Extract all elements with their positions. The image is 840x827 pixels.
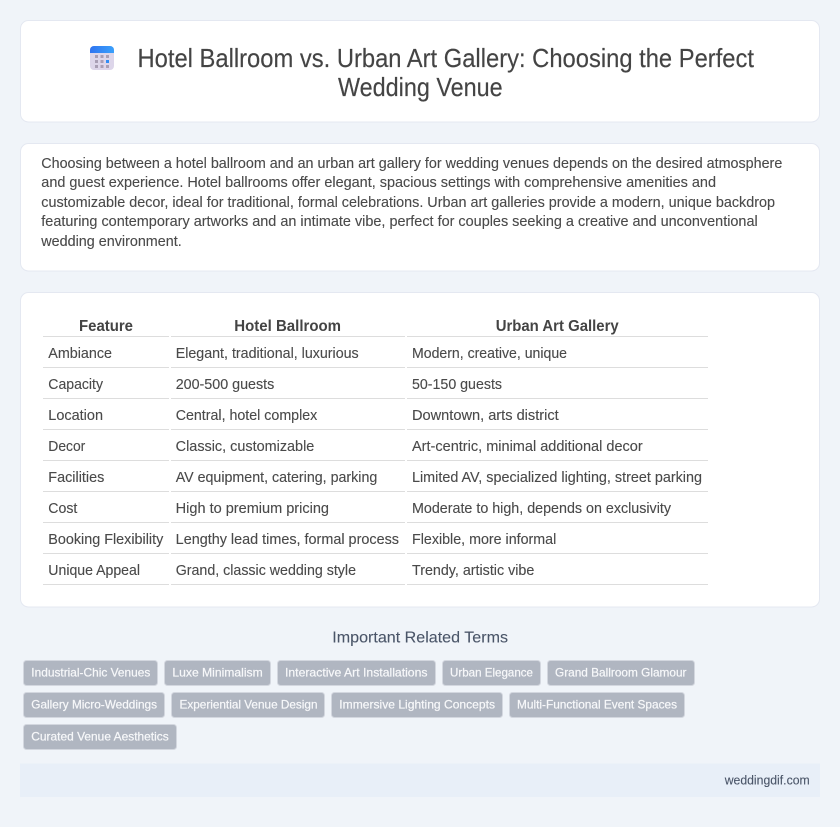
row: location: Central, hotel complex: [176, 408, 318, 424]
row: ambiance: Ambiance: [48, 346, 112, 362]
tag: [510, 692, 684, 718]
row: cost: High to premium pricing: [176, 501, 329, 517]
tag: Multi-Functional Event Spaces: [517, 698, 677, 712]
row: unique appeal: Unique Appeal: [48, 563, 140, 579]
tag: [278, 660, 436, 686]
tag: [24, 692, 164, 718]
intro paragraph: customizable decor, ideal for traditional, formal celebrations. Urban art galleries provide a modern, unique backdrop: [41, 195, 775, 211]
tag: [172, 692, 324, 718]
row: decor: Decor: [48, 439, 85, 455]
row: facilities: Limited AV, specialized lighting, street parking: [412, 470, 702, 486]
panel: introduction: [20, 144, 820, 271]
row: cost: [43, 501, 708, 523]
table header row: Hotel Ballroom: [234, 318, 341, 335]
panel: related term tags: [24, 660, 694, 750]
row: unique appeal: [43, 563, 708, 585]
intro paragraph: Choosing between a hotel ballroom and an urban art gallery for wedding venues depends on the desired atmosphere: [41, 156, 782, 172]
footer: [20, 764, 820, 797]
row: decor: Art-centric, minimal additional decor: [412, 439, 643, 455]
row: booking flexibility: [43, 532, 708, 554]
row: ambiance: Modern, creative, unique: [412, 346, 567, 362]
row: ambiance: Elegant, traditional, luxurious: [176, 346, 359, 362]
row: booking flexibility: Flexible, more informal: [412, 532, 556, 548]
row: capacity: Capacity: [48, 377, 104, 393]
row: facilities: Facilities: [48, 470, 104, 486]
tag: [442, 660, 540, 686]
tag: [332, 692, 502, 718]
tag: Grand Ballroom Glamour: [555, 666, 686, 680]
tag: Curated Venue Aesthetics: [31, 730, 169, 744]
tag: Industrial-Chic Venues: [31, 666, 150, 680]
row: location: [43, 408, 708, 430]
row: unique appeal: Trendy, artistic vibe: [412, 563, 534, 579]
tag: [164, 660, 270, 686]
panel: comparison table: [20, 292, 820, 607]
table header row: [43, 318, 708, 337]
tag: [24, 660, 158, 686]
intro paragraph: [40, 156, 782, 250]
tag: [548, 660, 694, 686]
icon: calendar: [90, 46, 114, 70]
tag: Gallery Micro-Weddings: [31, 698, 157, 712]
row: capacity: 200-500 guests: [176, 377, 274, 393]
row: booking flexibility: Booking Flexibility: [48, 532, 164, 548]
row: facilities: AV equipment, catering, parking: [176, 470, 377, 486]
tag: Experiential Venue Design: [180, 698, 318, 712]
row: cost: Moderate to high, depends on exclusivity: [412, 501, 672, 517]
table header row: Urban Art Gallery: [496, 318, 619, 335]
intro paragraph: featuring contemporary artworks and an intimate vibe, perfect for couples seeking a creative and unconventional: [41, 214, 758, 230]
row: ambiance: [43, 346, 708, 368]
tag: Urban Elegance: [450, 666, 533, 680]
footer domain: weddingdif.com: [724, 773, 810, 787]
row: decor: [43, 439, 708, 461]
row: capacity: [43, 377, 708, 399]
row: capacity: 50-150 guests: [412, 377, 502, 393]
tag: [24, 724, 176, 750]
intro paragraph: wedding environment.: [40, 234, 182, 250]
table header row: Feature: [79, 318, 133, 335]
row: location: Downtown, arts district: [412, 408, 559, 424]
row: location: Location: [48, 408, 103, 424]
tag: Interactive Art Installations: [285, 666, 428, 680]
title: [138, 45, 754, 102]
tag: Luxe Minimalism: [172, 666, 263, 680]
row: cost: Cost: [48, 501, 77, 517]
heading: important related terms: Important Related Terms: [332, 630, 508, 647]
title: Hotel Ballroom vs. Urban Art Gallery: Choosing the Perfect: [138, 45, 754, 73]
title: Wedding Venue: [338, 74, 503, 102]
row: booking flexibility: Lengthy lead times, formal process: [176, 532, 399, 548]
tag: Immersive Lighting Concepts: [339, 698, 495, 712]
intro paragraph: and guest experience. Hotel ballrooms offer elegant, spacious settings with comprehensive amenities and: [41, 175, 716, 191]
row: facilities: [43, 470, 708, 492]
panel: header: [20, 20, 820, 122]
row: unique appeal: Grand, classic wedding style: [176, 563, 356, 579]
row: decor: Classic, customizable: [176, 439, 314, 455]
